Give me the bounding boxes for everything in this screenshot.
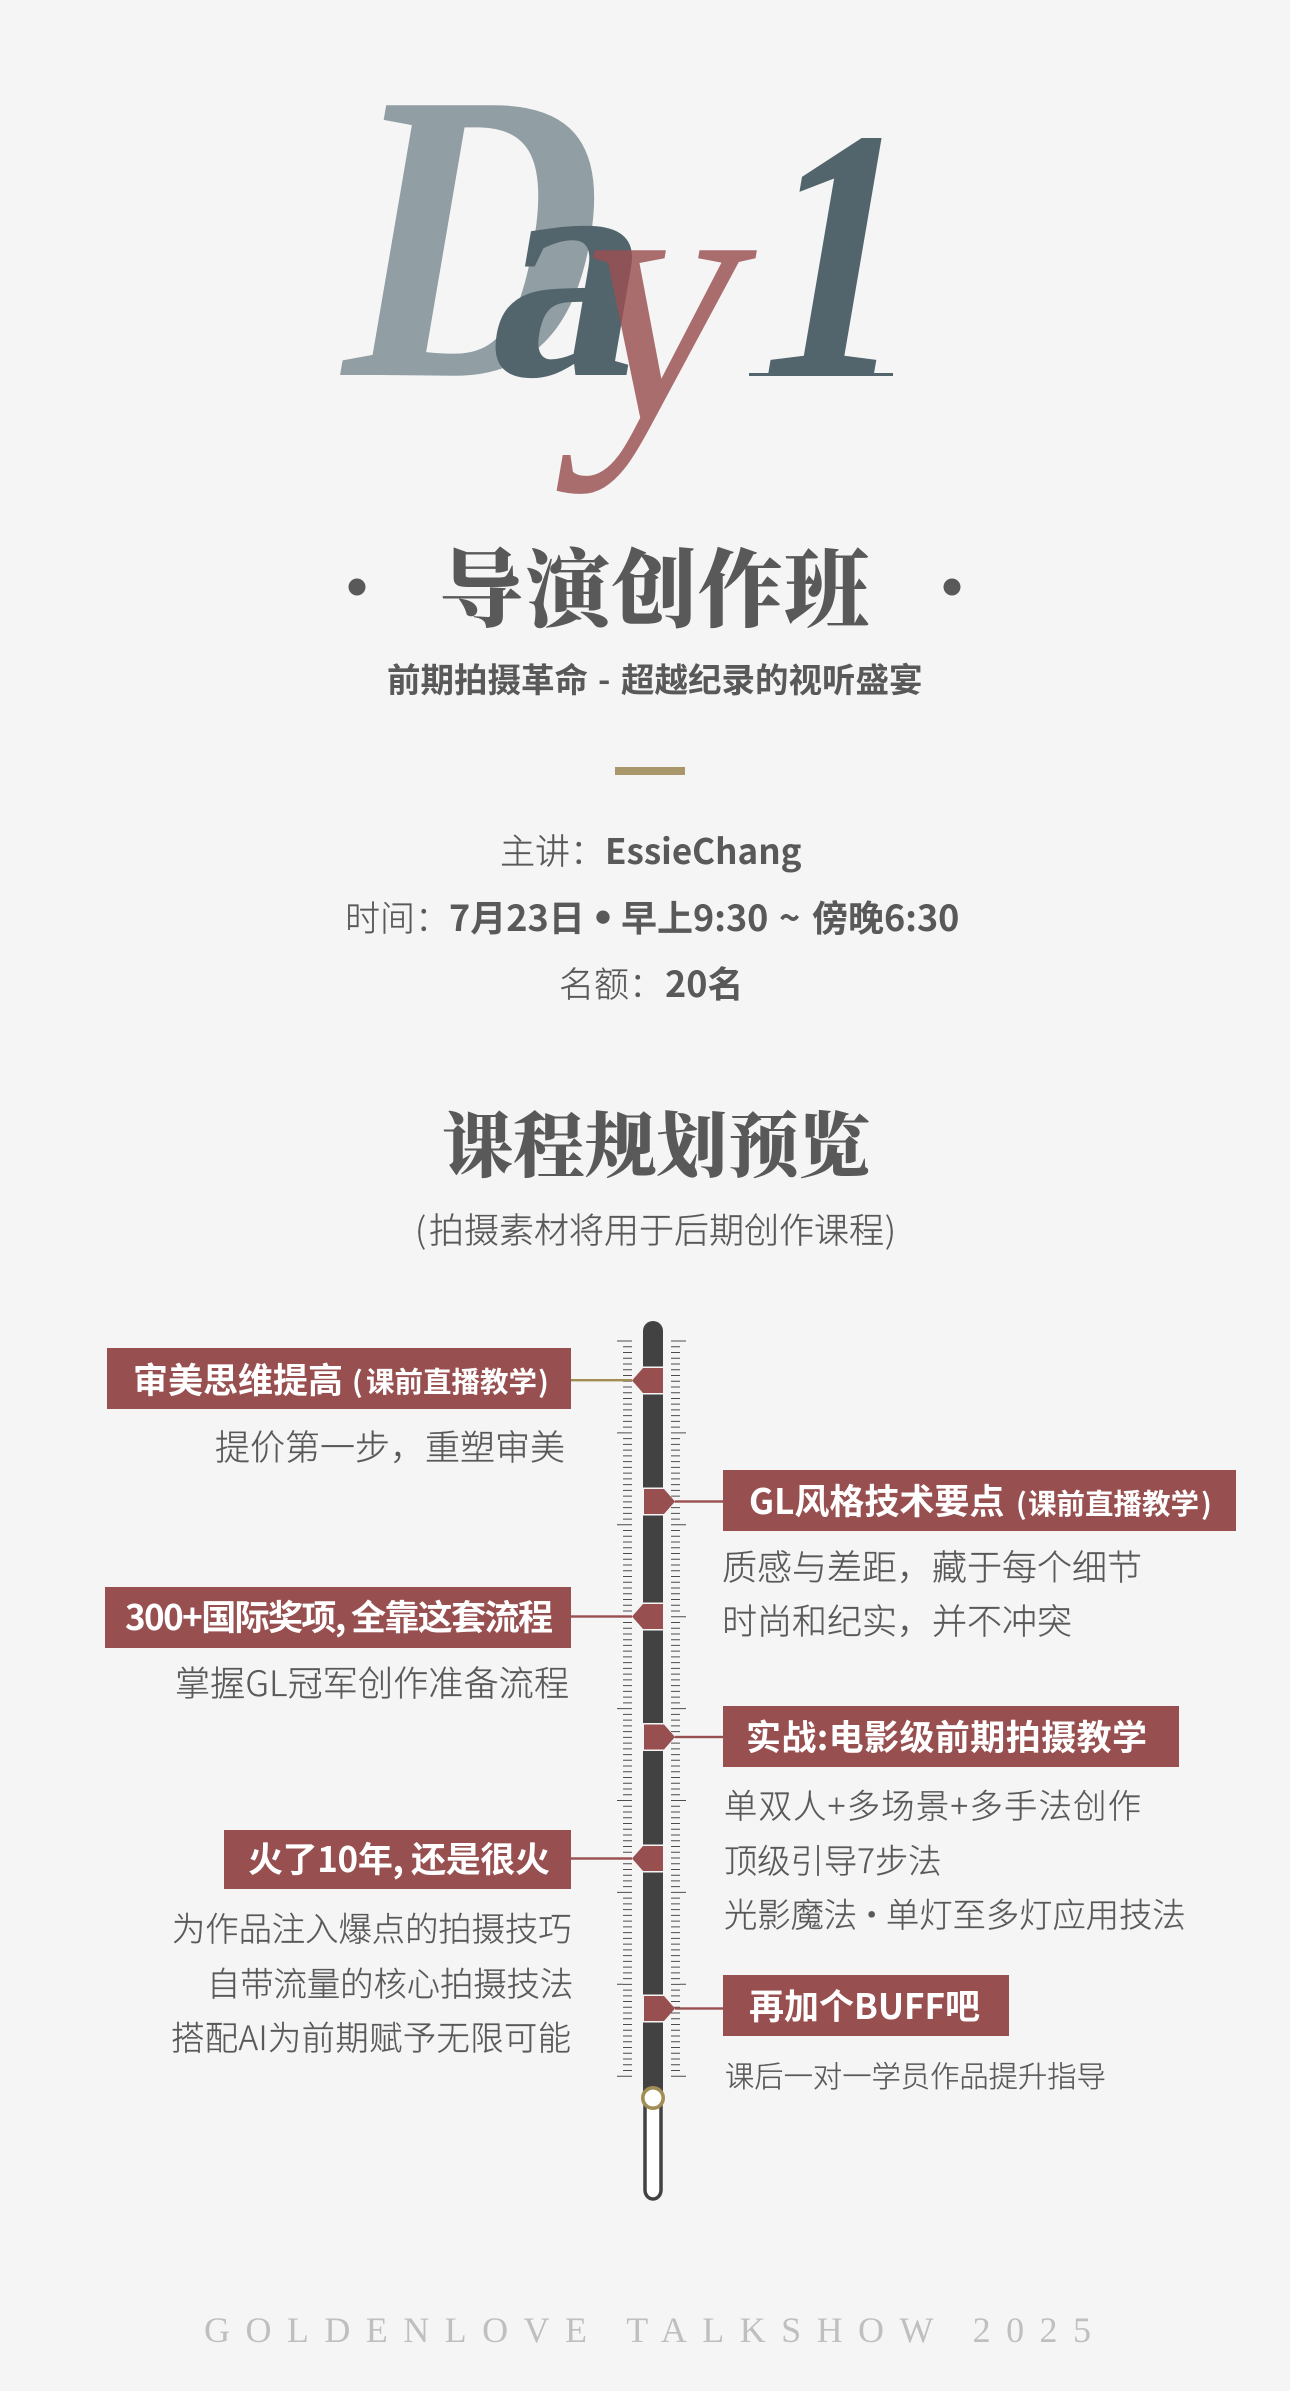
subtitle: 前期拍摄革命: [387, 653, 588, 702]
label 1: (: [352, 1360, 363, 1401]
description 2: [722, 1540, 1142, 1645]
note under heading: ): [885, 1203, 896, 1254]
marker 3: [632, 1602, 663, 1630]
label 1: [107, 1348, 571, 1409]
subtitle: 超越纪录的视听盛宴: [621, 653, 922, 702]
letter a: a: [468, 92, 679, 444]
label 6: 再加个BUFF吧: [749, 1979, 980, 2030]
seats: 20名: [665, 956, 743, 1008]
scale ticks: [620, 1340, 683, 2077]
description 2: 时尚和纪实，并不冲突: [722, 1594, 1072, 1645]
label 2: [723, 1470, 1236, 1531]
heading: course plan preview: 课程规划预览: [442, 1090, 870, 1192]
course name text: 导演创作班: [439, 523, 869, 645]
marker 1: [632, 1366, 663, 1394]
marker 4: [643, 1723, 675, 1751]
description 4: 光影魔法: [724, 1888, 857, 1937]
info block: teacher, time, seats: [345, 824, 959, 1008]
track empty end: [645, 2098, 661, 2199]
connector 2: [675, 1500, 723, 1503]
marker 6: [643, 1994, 675, 2022]
marker 2: [643, 1488, 675, 1516]
item 5: viral technique: [171, 1830, 663, 2060]
description 5: 自带流量的核心拍摄技法: [207, 1957, 573, 2006]
teacher: 主讲：: [500, 824, 605, 875]
description 4: [724, 1779, 1186, 1937]
numeral 1: 1: [732, 55, 943, 453]
label 2: (: [1016, 1482, 1027, 1523]
subtitle: -: [598, 653, 610, 702]
label 2: GL风格技术要点: [749, 1474, 1004, 1525]
letter D: D: [319, 8, 647, 464]
label 5: 火了10年, 还是很火: [248, 1832, 550, 1883]
description 1: 提价第一步，重塑审美: [215, 1420, 565, 1471]
time: 7月23日: [449, 890, 585, 942]
label 1: 课前直播教学: [366, 1360, 537, 1401]
footer: GOLDENLOVE TALKSHOW 2025: [204, 2310, 1091, 2350]
description 3: 掌握GL冠军创作准备流程: [175, 1656, 569, 1707]
time: ~: [779, 890, 800, 942]
label 6: [723, 1975, 1009, 2036]
description 5: 搭配AI为前期赋予无限可能: [171, 2011, 571, 2060]
track fill: [643, 1321, 663, 2098]
marker 5: [632, 1844, 663, 1872]
title: Day 1 lettering: [319, 8, 943, 495]
label 2: 课前直播教学: [1028, 1482, 1199, 1523]
label 1: 审美思维提高: [133, 1353, 343, 1404]
time: 傍晚6:30: [812, 890, 959, 942]
time: 早上9:30: [621, 890, 768, 942]
time: •: [577, 877, 629, 952]
item 1: aesthetics: [107, 1348, 663, 1471]
connector 3: [571, 1615, 632, 1618]
description 5: [171, 1902, 573, 2060]
label 2: ): [1201, 1482, 1212, 1523]
progress knob: [643, 2088, 663, 2108]
connector 4: [675, 1736, 723, 1738]
note under heading: (: [415, 1203, 426, 1254]
label 4: 实战:电影级前期拍摄教学: [746, 1710, 1147, 1761]
description 2: 质感与差距，藏于每个细节: [722, 1540, 1142, 1591]
dot right: [944, 578, 960, 596]
description 4: 顶级引导7步法: [724, 1834, 942, 1883]
connector 6: [675, 2007, 723, 2010]
item 2: GL style: [643, 1470, 1236, 1645]
item 3: award process: [105, 1587, 663, 1707]
label 3: 300+国际奖项, 全靠这套流程: [125, 1590, 553, 1641]
dot left: [348, 578, 366, 596]
connector 1: [571, 1379, 632, 1381]
note under heading: 拍摄素材将用于后期创作课程: [429, 1203, 884, 1254]
description 5: 为作品注入爆点的拍摄技巧: [172, 1902, 572, 1951]
item 4: shooting practice: [643, 1706, 1186, 1937]
letter y: y: [549, 94, 785, 495]
description 6: 课后一对一学员作品提升指导: [725, 2054, 1106, 2096]
teacher: EssieChang: [605, 824, 802, 875]
heading: course name: [348, 523, 960, 645]
item 6: buff: [643, 1975, 1106, 2096]
timeline ruler: [620, 1321, 683, 2199]
description 4: 单灯至多灯应用技法: [886, 1888, 1186, 1937]
description 4: 单双人+多场景+多手法创作: [724, 1779, 1141, 1828]
divider: gold bar: [615, 767, 685, 775]
connector 5: [571, 1857, 632, 1860]
time: 时间：: [345, 891, 450, 942]
description 4: ·: [855, 1888, 888, 1937]
seats: 名额：: [559, 957, 664, 1008]
label 1: ): [538, 1360, 549, 1401]
